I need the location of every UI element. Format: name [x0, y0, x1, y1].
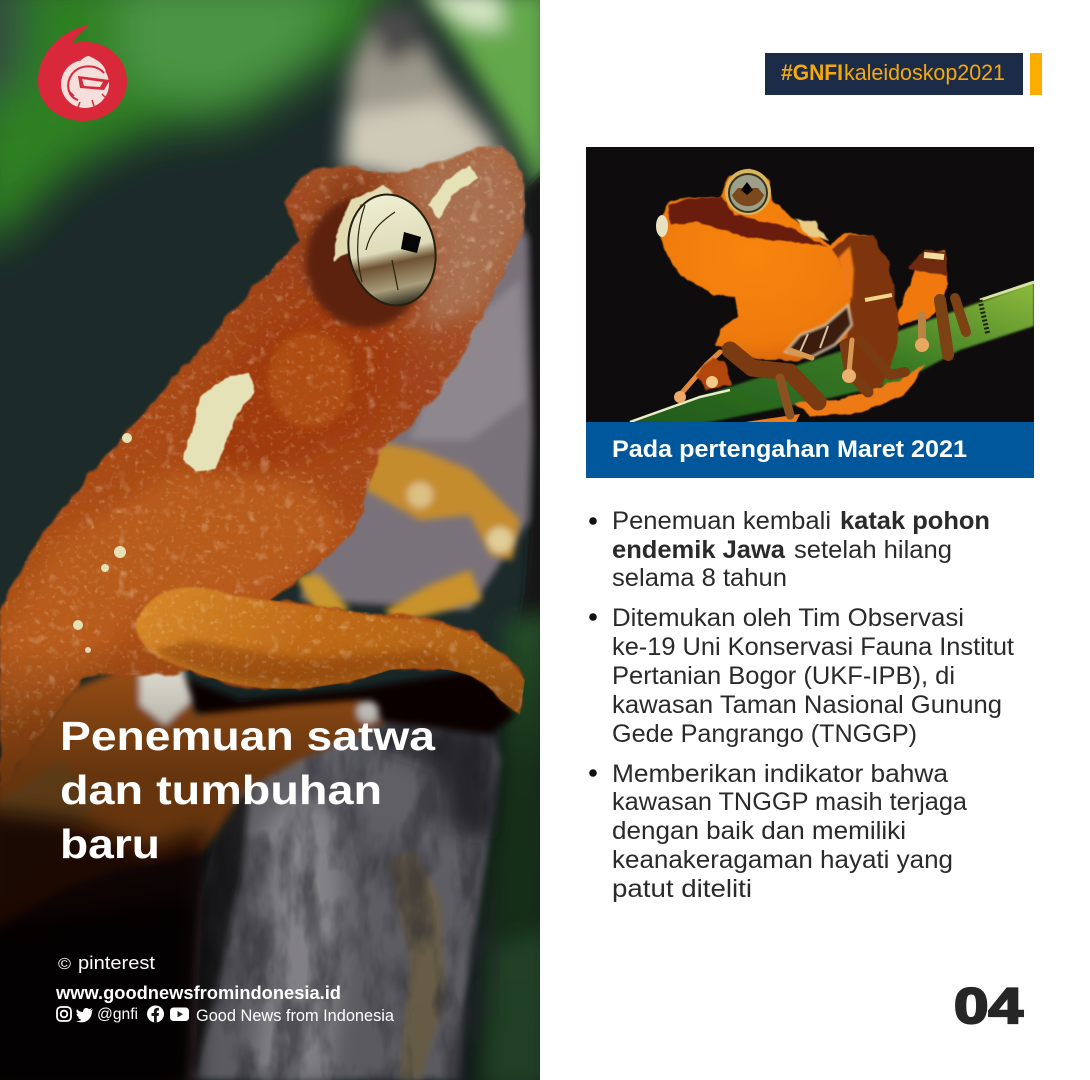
bullet 1: selama 8 tahun — [612, 564, 787, 592]
frog flank pattern — [785, 305, 852, 358]
bullet 2 — [589, 604, 1014, 748]
page number: 04 — [954, 978, 1023, 1034]
leaf highlight — [630, 390, 730, 422]
frog thigh — [832, 235, 899, 392]
bullet 1: endemik Jawa — [612, 536, 786, 564]
bullet 3: Memberikan indikator bahwa — [612, 760, 948, 788]
icon: youtube — [170, 1008, 189, 1021]
dark right green — [475, 610, 550, 1080]
frog rear toes — [915, 298, 966, 355]
bullet 1: setelah hilang — [794, 536, 952, 564]
lower left dark shade — [0, 810, 205, 1080]
frog eye — [725, 169, 771, 215]
icon: instagram — [57, 1007, 71, 1021]
shadow gap under leg — [175, 670, 515, 740]
photo background — [586, 147, 1034, 422]
hashtag tag: kaleidoskop2021 — [844, 60, 1005, 85]
frog belly under leaf — [795, 364, 925, 416]
bullet 2: ke-19 Uni Konservasi Fauna Institut — [612, 633, 1014, 661]
bullet 1: katak pohon — [840, 507, 990, 535]
bullet 3: dengan baik dan memiliki — [612, 817, 906, 845]
tag accent bar — [1030, 53, 1042, 95]
logo white G eagle — [61, 56, 110, 108]
frog back ridge — [795, 218, 828, 240]
frog body — [657, 168, 895, 360]
panel: small frog photo — [586, 147, 1034, 424]
website and social footer — [55, 983, 395, 1025]
frog head top — [668, 197, 826, 246]
bottom vignette — [0, 640, 540, 1080]
frog left foot — [696, 358, 732, 390]
frog eye — [306, 185, 446, 328]
heading: Penemuan satwa dan tumbuhan baru — [60, 713, 436, 867]
frog rear leg — [895, 250, 948, 325]
lower left far shade — [0, 900, 190, 1080]
heading: Penemuan satwa dan tumbuhan baru: dan tumbuhan — [60, 767, 382, 813]
top right leaf — [410, 0, 540, 190]
leaf joint — [980, 300, 988, 335]
bullet 1 — [589, 507, 990, 592]
photo credit: pinterest — [78, 952, 155, 973]
bullet 2: Pertanian Bogor (UKF-IPB), di — [612, 662, 955, 690]
bullet 2: Gede Pangrango (TNGGP) — [612, 720, 917, 748]
bullet 3: keanakeragaman hayati yang — [612, 846, 953, 874]
website url: www.goodnewsfromindonesia.id — [55, 983, 341, 1003]
caption bar: Pada pertengahan Maret 2021 — [612, 436, 967, 463]
photo credit: © — [58, 956, 71, 973]
bullet 2: kawasan Taman Nasional Gunung — [612, 691, 1002, 719]
photo background — [0, 0, 540, 1080]
handle: @gnfi: @gnfi — [97, 1006, 138, 1023]
logo red drop — [38, 25, 127, 121]
heading: Penemuan satwa dan tumbuhan baru: baru — [60, 821, 160, 867]
bullet 3 — [589, 760, 967, 903]
green leaf — [627, 282, 1034, 424]
bullet list — [589, 507, 1014, 903]
hashtag tag: #GNFI — [781, 60, 843, 85]
frog body — [0, 140, 540, 790]
frog snout — [656, 215, 668, 237]
upper branch — [340, 5, 510, 190]
icon: facebook — [147, 1006, 164, 1023]
bullet 3: kawasan TNGGP masih terjaga — [612, 788, 967, 816]
icon: twitter — [76, 1008, 93, 1022]
panel: left frog photo — [0, 0, 550, 1080]
blurred green foliage — [0, 0, 400, 240]
frog front legs — [680, 340, 905, 415]
bullet 3: patut diteliti — [612, 875, 752, 903]
logo — [38, 25, 127, 121]
caption bar — [586, 422, 1034, 478]
hashtag tag — [765, 53, 1023, 95]
branch behind head — [297, 170, 540, 618]
bullet 2: Ditemukan oleh Tim Observasi — [612, 604, 964, 632]
heading: Penemuan satwa dan tumbuhan baru: Penemuan satwa — [60, 713, 436, 759]
cream skin patches — [73, 165, 478, 653]
page name: Good News from Indonesia — [196, 1007, 395, 1025]
frog hand behind body — [295, 440, 520, 625]
lower trunk — [185, 700, 500, 1080]
frog lower arm — [0, 660, 385, 930]
bullet 1: Penemuan kembali — [612, 507, 831, 535]
